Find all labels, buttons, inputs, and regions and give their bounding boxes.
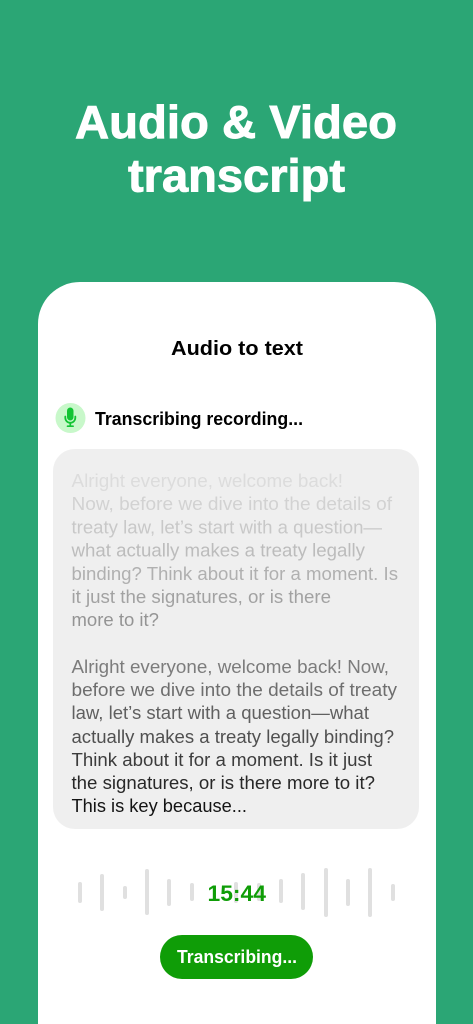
status text: Transcribing recording...	[95, 409, 303, 429]
text block: current transcript paragraph: Alright everyone, welcome back! Now,	[72, 657, 389, 677]
text block: faded transcript paragraph: what actually makes a treaty legally	[70, 540, 365, 560]
audio waveform	[78, 868, 395, 917]
text block: current transcript paragraph: actually makes a treaty legally binding?	[72, 727, 394, 747]
text block: current transcript paragraph: the signatures, or is there more to it?	[72, 773, 375, 793]
text block: faded transcript paragraph: binding? Think about it for a moment. Is	[72, 564, 398, 584]
text block: faded transcript paragraph: more to it?	[72, 610, 159, 630]
text block: current transcript paragraph	[72, 657, 397, 816]
text block: current transcript paragraph: This is key because...	[72, 796, 247, 816]
title	[75, 96, 397, 202]
card heading: Audio to text	[171, 338, 303, 360]
panel: transcript box	[53, 449, 419, 829]
panel: white phone card	[38, 282, 436, 1024]
text block: faded transcript paragraph: Alright everyone, welcome back!	[72, 471, 343, 491]
timer: 15:44	[208, 881, 267, 906]
button: transcribing: Transcribing...	[177, 947, 297, 967]
title: transcript	[128, 150, 345, 202]
text block: faded transcript paragraph	[70, 471, 398, 630]
button: transcribing	[160, 935, 313, 979]
title: Audio & Video	[75, 96, 397, 148]
text block: faded transcript paragraph: it just the signatures, or is there	[72, 587, 331, 607]
text block: faded transcript paragraph: Now, before we dive into the details of	[72, 494, 393, 514]
text block: current transcript paragraph: Think about it for a moment. Is it just	[72, 750, 372, 770]
text block: current transcript paragraph: before we dive into the details of treaty	[72, 680, 397, 700]
text block: faded transcript paragraph: treaty law, let’s start with a question—	[72, 518, 382, 538]
icon: microphone	[56, 403, 86, 433]
text block: current transcript paragraph: law, let’s start with a question—what	[72, 703, 369, 723]
